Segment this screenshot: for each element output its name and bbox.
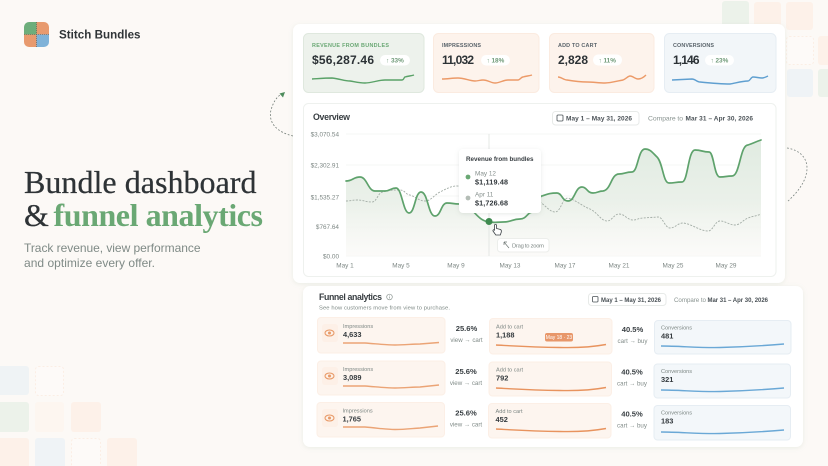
chart tooltip: $1,726.68: [475, 198, 508, 208]
rate: view to cart: [450, 324, 483, 344]
add to cart card: [490, 318, 612, 354]
conversions card: 183: [661, 416, 673, 426]
add to cart card: 792: [496, 374, 508, 382]
logo: [24, 22, 140, 47]
chart hover tag: May 18 · 23: [546, 335, 572, 341]
x axis labels: May 5: [392, 262, 410, 270]
rate: cart to buy: 40.5%: [622, 325, 644, 334]
compare range: Compare to: [674, 297, 707, 304]
impressions card: [318, 361, 445, 395]
date range picker: May 1 – May 31, 2026: [566, 116, 632, 122]
chart tooltip: $1,119.48: [475, 178, 508, 186]
arrow: dashed left curve: [270, 92, 293, 136]
brand name: Stitch Bundles: [59, 28, 140, 42]
rate: cart to buy: cart → buy: [618, 338, 648, 345]
add to cart card: Add to cart: [496, 409, 523, 415]
stat card: impressions: IMPRESSIONS: [442, 43, 481, 49]
x axis labels: May 9: [447, 262, 465, 270]
impressions card: [317, 402, 444, 437]
y axis labels: $1,535.27: [311, 194, 339, 202]
chart tooltip: [459, 149, 541, 213]
chart tooltip: Revenue from bundles: [466, 156, 534, 163]
rate: view to cart: 25.6%: [455, 367, 477, 376]
rate: view to cart: view → cart: [450, 380, 482, 387]
stat card: conversions: [664, 34, 776, 92]
headline: Bundle dashboard: [24, 164, 256, 200]
panel: funnel analytics: [303, 286, 803, 447]
x axis labels: May 21: [609, 262, 630, 270]
date range picker: [588, 294, 666, 306]
drag to zoom button: [498, 238, 549, 252]
y axis labels: $0.00: [323, 254, 339, 260]
add to cart card: 1,188: [496, 330, 514, 340]
arrow: dashed right curve: [787, 148, 807, 202]
rate: view to cart: view → cart: [450, 337, 483, 344]
funnel row 1: [318, 318, 791, 354]
drag to zoom button: Drag to zoom: [512, 244, 544, 250]
y axis labels: [311, 132, 339, 260]
chart tooltip: Apr 11: [475, 192, 494, 198]
add to cart card: [488, 404, 611, 438]
add to cart card: Add to cart: [496, 324, 523, 330]
impressions card: 4,633: [343, 330, 362, 339]
headline: &: [24, 197, 49, 233]
funnel subtitle: See how customers move from view to purchase.: [319, 306, 450, 312]
rate: cart to buy: 40.5%: [621, 410, 643, 418]
subtitle: and optimize every offer.: [24, 256, 155, 270]
y axis labels: $3,070.54: [311, 132, 339, 138]
stat card: add to cart: ADD TO CART: [558, 43, 598, 49]
crosshair: [488, 134, 490, 256]
x axis labels: May 17: [555, 262, 576, 270]
subtitle: [24, 241, 201, 270]
icon: four-square logo: [24, 22, 49, 47]
area fill: [346, 140, 761, 256]
icon: info: [387, 294, 392, 300]
rate: view to cart: [450, 408, 482, 428]
date range picker: [552, 112, 639, 125]
add to cart card: [489, 362, 612, 396]
stat card: impressions: [434, 34, 539, 92]
stat card: revenue from bundles: $56,287.46: [312, 53, 374, 67]
impressions card: 1,765: [342, 414, 361, 424]
funnel row 2: [318, 361, 790, 398]
x axis labels: [336, 262, 737, 270]
y axis labels: $767.64: [316, 224, 339, 231]
stat card: revenue from bundles: [304, 34, 424, 92]
rate: view to cart: view → cart: [450, 422, 482, 428]
stat card: conversions: 1,146: [673, 53, 700, 67]
rate: cart to buy: cart → buy: [617, 380, 648, 388]
conversions card: [654, 320, 791, 354]
subtitle: Track revenue, view performance: [24, 241, 201, 255]
conversions card: 481: [661, 332, 673, 340]
add to cart card: Add to cart: [496, 368, 523, 374]
stat card: impressions: ↑ 18%: [486, 58, 505, 64]
rate: cart to buy: 40.5%: [621, 368, 643, 376]
rate: view to cart: [450, 367, 482, 387]
stat card: conversions: ↑ 23%: [710, 58, 729, 64]
impressions card: [318, 318, 445, 353]
stat card: conversions: CONVERSIONS: [673, 43, 714, 49]
rate: cart to buy: [617, 368, 648, 388]
impressions card: 3,089: [343, 373, 362, 382]
impressions card: Impressions: [343, 324, 373, 330]
compare range: Compare to: [648, 116, 683, 122]
compare range: Mar 31 – Apr 30, 2026: [708, 298, 769, 304]
x axis labels: May 13: [500, 262, 521, 270]
add to cart card: 452: [496, 415, 508, 424]
x axis labels: May 1: [336, 262, 354, 270]
compare range: [648, 116, 753, 122]
stat card: add to cart: 2,828: [558, 53, 588, 67]
primary green line: [346, 140, 761, 222]
rate: view to cart: 25.6%: [456, 324, 478, 333]
stat card: revenue from bundles: ↑ 33%: [386, 58, 404, 64]
comparison dashed line: [346, 186, 761, 231]
compare range: [674, 297, 769, 304]
rate: cart to buy: cart → buy: [617, 422, 648, 430]
chart tooltip: May 12: [475, 170, 496, 178]
impressions card: Impressions: [342, 408, 373, 414]
conversions card: [654, 364, 790, 398]
stat card: impressions: 11,032: [442, 53, 474, 67]
heading: overview: Overview: [313, 112, 350, 122]
chart: revenue line chart: [311, 132, 761, 270]
heading: funnel analytics: Funnel analytics: [319, 292, 382, 302]
impressions card: Impressions: [343, 367, 373, 373]
decorative tiles: bottom left: [0, 366, 137, 466]
rate: cart to buy: [618, 325, 648, 345]
hover marker: [486, 218, 492, 225]
conversions card: Conversions: [661, 410, 692, 416]
stat card: add to cart: ↑ 11%: [598, 58, 616, 64]
rate: cart to buy: [617, 410, 648, 430]
conversions card: [654, 406, 790, 440]
conversions card: 321: [661, 375, 673, 384]
panel: dashboard card: [293, 24, 785, 283]
rate: view to cart: 25.6%: [455, 408, 477, 418]
headline: [24, 164, 263, 233]
headline: funnel analytics: [54, 197, 263, 233]
y axis labels: $2,302.91: [311, 162, 339, 170]
x axis labels: May 25: [663, 262, 684, 270]
decorative tiles: top right: [722, 1, 828, 97]
x axis labels: May 29: [716, 262, 737, 270]
stat card: add to cart: [550, 34, 654, 92]
funnel row 3: [317, 402, 790, 440]
panel: overview: [304, 104, 776, 276]
compare range: Mar 31 – Apr 30, 2026: [686, 116, 753, 122]
conversions card: Conversions: [661, 326, 692, 332]
icon: hand cursor: [493, 224, 501, 235]
conversions card: Conversions: [661, 369, 692, 375]
date range picker: May 1 – May 31, 2026: [601, 298, 662, 304]
stat card: revenue from bundles: REVENUE FROM BUNDLES: [312, 43, 389, 49]
